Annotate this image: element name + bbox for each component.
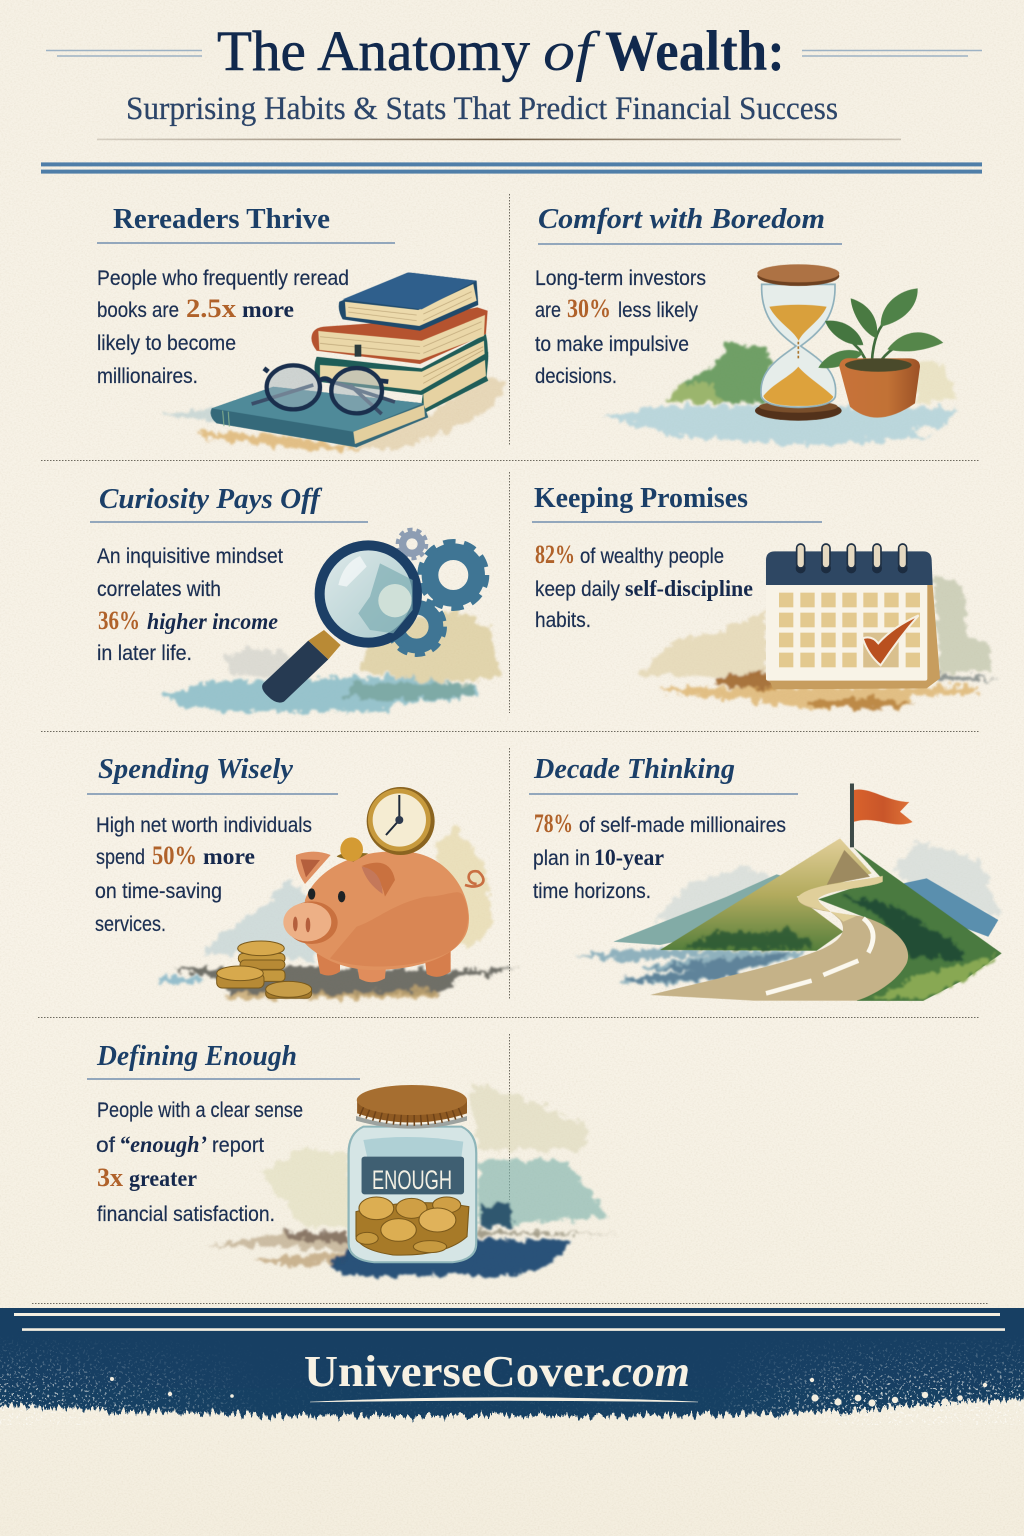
double blue rule	[41, 162, 982, 174]
brushed navy band edge	[0, 1380, 1024, 1416]
text: boredom stat: are	[535, 299, 561, 322]
text: boredom stat: Long-term investors	[535, 267, 706, 290]
text: spending stat: High net worth individuals	[96, 814, 312, 837]
icon: calendar with checkmark	[637, 544, 997, 709]
text: decade stat: 78%	[534, 809, 573, 838]
text: promises stat: self-discipline	[625, 576, 753, 601]
icon: books and glasses	[160, 272, 507, 451]
footer band	[0, 1308, 1024, 1425]
lower teal book	[211, 387, 428, 447]
text: rereaders stat	[97, 267, 349, 388]
grid dividers	[32, 194, 988, 1304]
title	[217, 20, 785, 83]
text: curiosity stat: higher income	[147, 609, 278, 634]
bottom stack book	[422, 352, 488, 413]
tail	[465, 871, 483, 886]
clock	[367, 787, 435, 855]
panel: keeping promises	[532, 482, 997, 709]
leaves	[843, 322, 913, 370]
panel: decade thinking	[529, 753, 1002, 1001]
glass	[761, 284, 836, 407]
snout	[286, 901, 338, 944]
text: decade stat: of self-made millionaires	[579, 814, 786, 837]
jar coins	[356, 1197, 469, 1255]
footer splatter	[110, 1377, 987, 1407]
heading: defining enough: Defining Enough	[96, 1040, 297, 1072]
icon: jar of coins	[206, 1083, 619, 1277]
forest patches	[683, 897, 998, 999]
panel: rereaders thrive	[97, 203, 507, 451]
text: enough stat: greater	[129, 1166, 197, 1191]
flag	[850, 783, 854, 847]
jar label	[362, 1157, 464, 1194]
text: boredom stat	[535, 267, 706, 388]
coin slot coin	[337, 853, 368, 862]
text: boredom stat: less likely	[618, 299, 698, 322]
text: rereaders stat: 2.5x	[186, 294, 236, 323]
navy band body	[0, 1308, 1024, 1388]
panel: spending wisely	[87, 753, 518, 999]
subtitle rule	[97, 139, 901, 140]
body	[302, 851, 469, 970]
text: boredom stat: decisions.	[535, 365, 617, 388]
text: curiosity stat: An inquisitive mindset	[97, 545, 283, 568]
title side ornaments	[46, 50, 982, 56]
text: curiosity stat: 36%	[98, 606, 140, 635]
heading: keeping promises: Keeping Promises	[534, 482, 748, 514]
heading: spending wisely: Spending Wisely	[98, 753, 293, 785]
base	[755, 401, 842, 421]
jar glass	[349, 1127, 476, 1262]
text: promises stat: of wealthy people	[580, 545, 724, 568]
red book	[311, 307, 488, 364]
text: spending stat: spend	[96, 846, 145, 869]
text: spending stat: 50%	[152, 841, 197, 870]
text: spending stat: on time-saving	[95, 880, 222, 903]
text: decade stat: time horizons.	[533, 880, 651, 903]
text: curiosity stat	[97, 545, 283, 665]
footer speckle texture	[0, 1330, 1024, 1425]
text: promises stat: keep daily	[535, 578, 620, 601]
ears	[296, 852, 331, 884]
text: enough stat: 3x	[97, 1163, 123, 1192]
footer white lines	[14, 1314, 1005, 1330]
text: enough stat: report	[212, 1134, 264, 1157]
title: Wealth:	[605, 20, 785, 83]
text: enough stat: of	[96, 1134, 115, 1157]
coin stacks	[217, 941, 312, 998]
panel: comfort with boredom	[535, 203, 958, 445]
text: rereaders stat: more	[242, 297, 294, 322]
text: boredom stat: 30%	[567, 294, 611, 323]
text: decade stat: plan in	[533, 847, 590, 870]
heading: comfort with boredom: Comfort with Boredom	[538, 203, 825, 235]
back ranges	[613, 874, 797, 945]
eyes	[308, 888, 315, 900]
panel: curiosity pays off	[90, 483, 500, 712]
title: The Anatomy	[217, 20, 531, 83]
text: spending stat: services.	[95, 913, 166, 936]
lens	[320, 545, 417, 643]
heading: rereaders thrive: Rereaders Thrive	[113, 203, 330, 235]
icon: jar of coins: ENOUGH	[372, 1165, 452, 1195]
text: decade stat	[533, 809, 786, 903]
subtitle: Surprising Habits & Stats That Predict Financial Success	[126, 91, 838, 127]
text: promises stat	[535, 540, 753, 632]
text: promises stat: 82%	[535, 540, 575, 569]
road	[650, 876, 908, 1001]
text: rereaders stat: People who frequently reread	[97, 267, 349, 290]
title: of	[543, 21, 602, 83]
blue book	[339, 272, 478, 331]
text: enough stat	[96, 1099, 303, 1226]
text: boredom stat: to make impulsive	[535, 333, 689, 356]
legs	[317, 953, 340, 975]
gears	[389, 530, 486, 654]
footer url: UniverseCover.	[304, 1347, 612, 1396]
text: enough stat: financial satisfaction.	[97, 1203, 275, 1226]
calendar rings	[796, 563, 908, 573]
text: rereaders stat: books are	[97, 299, 179, 322]
text: enough stat: “enough’	[119, 1132, 207, 1157]
text: rereaders stat: millionaires.	[97, 365, 198, 388]
icon: magnifier and gears	[160, 530, 500, 712]
heading: curiosity pays off: Curiosity Pays Off	[99, 483, 323, 515]
panel: defining enough	[87, 1040, 619, 1277]
text: spending stat: more	[203, 844, 255, 869]
text: enough stat: People with a clear sense	[97, 1099, 303, 1122]
footer swoosh	[310, 1398, 698, 1402]
glasses	[252, 365, 395, 414]
text: spending stat	[95, 814, 312, 936]
text: rereaders stat: likely to become	[97, 332, 236, 355]
text: promises stat: habits.	[535, 609, 591, 632]
pot	[839, 358, 920, 418]
icon: mountain road with flag	[572, 783, 1002, 1001]
lid	[757, 266, 839, 286]
text: curiosity stat: in later life.	[97, 642, 192, 665]
green book	[314, 334, 488, 395]
heading: decade thinking: Decade Thinking	[533, 753, 735, 785]
text: decade stat: 10-year	[594, 845, 664, 870]
text: curiosity stat: correlates with	[97, 578, 221, 601]
icon: piggy bank with clock and coins	[157, 787, 518, 999]
mountain	[818, 847, 1002, 1001]
handle	[262, 641, 328, 703]
footer url: com	[612, 1347, 690, 1396]
calendar cells	[779, 593, 920, 667]
jar lid	[356, 1116, 467, 1129]
icon: hourglass and plant	[603, 264, 958, 445]
